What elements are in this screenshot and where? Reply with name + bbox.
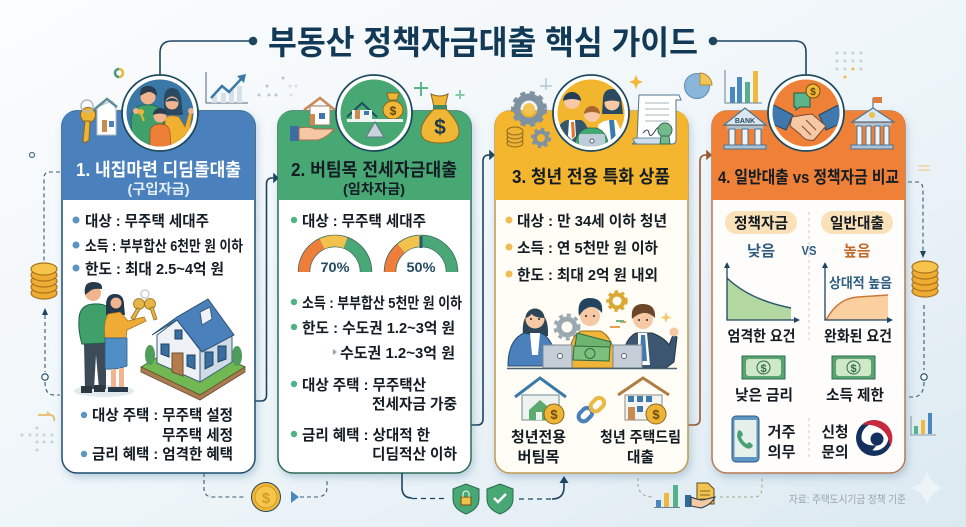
subheading: (임차자금) <box>343 181 405 197</box>
icon: banknote right: $ <box>850 363 857 375</box>
icon: gold coin: $ <box>262 490 271 507</box>
comparison labels: 높음 <box>844 243 871 260</box>
icon: banknote left <box>742 356 785 379</box>
bullet list top: 소득 : 부부합산 6천만 원 이하 <box>85 238 243 255</box>
icon: youth dream house <box>618 378 669 424</box>
bullet list top: 대상 : 무주택 세대주 <box>85 213 209 230</box>
icon: house on hand <box>290 98 335 141</box>
text: application inquiry <box>822 424 848 461</box>
bullet list: 대상 : 무주택 세대주 <box>302 213 426 230</box>
chart: 50% gauge: 50% <box>406 259 436 275</box>
labels: youth products <box>511 429 681 466</box>
bullet list: 디딤적산 이하 <box>372 446 457 463</box>
subheading: (구입자금) <box>128 181 190 197</box>
benefit labels: 낮은 금리 <box>735 387 793 404</box>
icon: document with seal <box>632 95 681 144</box>
bullet list: 수도권 1.2~3억 원 <box>340 345 455 362</box>
icon: gears and coins <box>507 93 550 147</box>
icon: shield check <box>487 484 513 514</box>
requirement labels: 엄격한 요건 <box>728 328 796 345</box>
labels: youth products: 청년전용 <box>511 429 566 446</box>
bullet list: 소득 : 부부합산 5천만 원 이하 <box>302 295 462 312</box>
icon: bank: BANK <box>735 118 755 125</box>
bullet list: 한도 : 최대 2억 원 내외 <box>517 267 658 284</box>
bullet list top <box>72 213 243 463</box>
icon: youth rental house: $ <box>550 407 558 422</box>
icon: banknote right <box>832 356 875 379</box>
text: residence duty <box>768 424 796 461</box>
icon: chain link <box>577 396 606 423</box>
pill: 정책자금 <box>725 211 797 234</box>
benefit labels <box>735 387 884 404</box>
icon: right coin stack <box>912 261 938 297</box>
icon: banknote left: $ <box>760 363 767 375</box>
comparison labels <box>747 243 871 260</box>
panel 2: 버팀목 전세자금대출 <box>278 111 471 473</box>
chart: 70% gauge: 70% <box>320 259 350 275</box>
bullet list: 대상 주택 : 무주택산 <box>302 377 426 394</box>
dashed side connectors <box>44 172 924 397</box>
benefit labels: 소득 제한 <box>826 387 884 404</box>
icon: phone <box>732 416 759 462</box>
icon: growth chart <box>206 72 248 103</box>
circle badge 2: balance <box>336 75 412 151</box>
panel 3: 청년 전용 특화 상품 <box>495 111 688 473</box>
icon: government taegeuk <box>856 420 892 456</box>
icon: bar chart top <box>725 70 762 103</box>
title: 부동산 정책자금대출 핵심 가이드 <box>268 24 698 61</box>
illustration: young team with money <box>507 292 678 368</box>
chart: general loan rising curve <box>822 262 893 323</box>
icon: house and key <box>80 99 117 143</box>
bullet list top: 한도 : 최대 2.5~4억 원 <box>85 261 224 278</box>
title connector lines <box>160 38 806 76</box>
bottom connector 3 with chart and document <box>638 476 762 508</box>
heading: 3. 청년 전용 특화 상품 <box>512 167 670 187</box>
requirement labels <box>728 328 892 345</box>
chart: 50% gauge <box>390 236 452 275</box>
bullet list: 한도 : 수도권 1.2~3억 원 <box>302 320 455 337</box>
source note: 자료: 주택도시기금 정책 기준 <box>789 493 906 506</box>
icon: money bag <box>421 94 459 143</box>
bullet list top: 대상 주택 : 무주택 설정 <box>92 407 233 424</box>
chart: policy loan falling curve <box>724 262 800 323</box>
comparison labels: VS <box>802 243 817 258</box>
icon: money bag: $ <box>434 116 446 139</box>
icon: youth dream house: $ <box>652 407 660 422</box>
pill: 정책자금: 정책자금 <box>734 215 788 232</box>
bullet list top: 금리 혜택 : 엄격한 혜택 <box>92 446 233 463</box>
labels: youth products: 버팀목 <box>518 449 560 466</box>
heading: 2. 버팀목 전세자금대출 <box>291 160 457 180</box>
bullet list: 대상 : 만 34세 이하 청년 <box>517 213 667 230</box>
connector markers <box>42 251 927 380</box>
circle badge 3: young people <box>553 75 630 151</box>
bullet list: 소득 : 연 5천만 원 이하 <box>517 240 658 257</box>
icon: left coin stack <box>31 263 57 299</box>
pill: 일반대출: 일반대출 <box>830 215 884 232</box>
small bar chart right <box>911 413 936 435</box>
icon: government building <box>851 97 894 149</box>
heading: 1. 내집마련 디딤돌대출 <box>76 160 241 180</box>
bullet list: 금리 혜택 : 상대적 한 <box>302 427 430 444</box>
icon: youth rental house <box>515 378 566 424</box>
icon: hand with document <box>685 483 715 508</box>
bullet list: 전세자금 가중 <box>372 396 457 413</box>
bullet list <box>291 213 462 463</box>
labels: youth products: 청년 주택드림 <box>600 429 681 446</box>
labels: youth products: 대출 <box>627 449 654 466</box>
comparison labels: 낮음 <box>747 243 775 260</box>
text: residence duty: 의무 <box>768 444 796 461</box>
bullet list top: 무주택 세정 <box>162 427 233 444</box>
requirement labels: 완화된 요건 <box>824 328 892 345</box>
chart: 70% gauge <box>304 241 366 275</box>
text: application inquiry: 문의 <box>822 444 848 461</box>
icon: pie chart <box>684 73 712 98</box>
bullet list <box>506 213 667 284</box>
icon: shield lock <box>453 484 479 514</box>
circle badge 4: handshake <box>768 75 844 151</box>
panel 1: 내집마련 디딤돌대출 <box>62 111 255 473</box>
circle badge 4: handshake: $ <box>810 87 816 98</box>
bottom connector 1 with coin <box>204 473 327 512</box>
chart: general loan rising curve: 상대적 높음 <box>829 275 892 291</box>
pill: 일반대출 <box>821 211 893 234</box>
icon: small bars <box>654 485 680 508</box>
flow arrows between panels <box>255 152 711 425</box>
bottom connector 2 with shields <box>402 473 568 514</box>
icon: bank <box>724 108 766 149</box>
circle badge 2: balance: $ <box>390 104 397 118</box>
text: application inquiry: 신청 <box>822 424 848 441</box>
circle badge 1: family <box>122 75 198 154</box>
illustration: couple and house <box>74 282 245 400</box>
heading: 4. 일반대출 vs 정책자금 비교 <box>718 168 899 187</box>
panel 4: 일반대출 vs 정책자금 비교 <box>712 111 905 473</box>
text: residence duty: 거주 <box>768 424 796 441</box>
